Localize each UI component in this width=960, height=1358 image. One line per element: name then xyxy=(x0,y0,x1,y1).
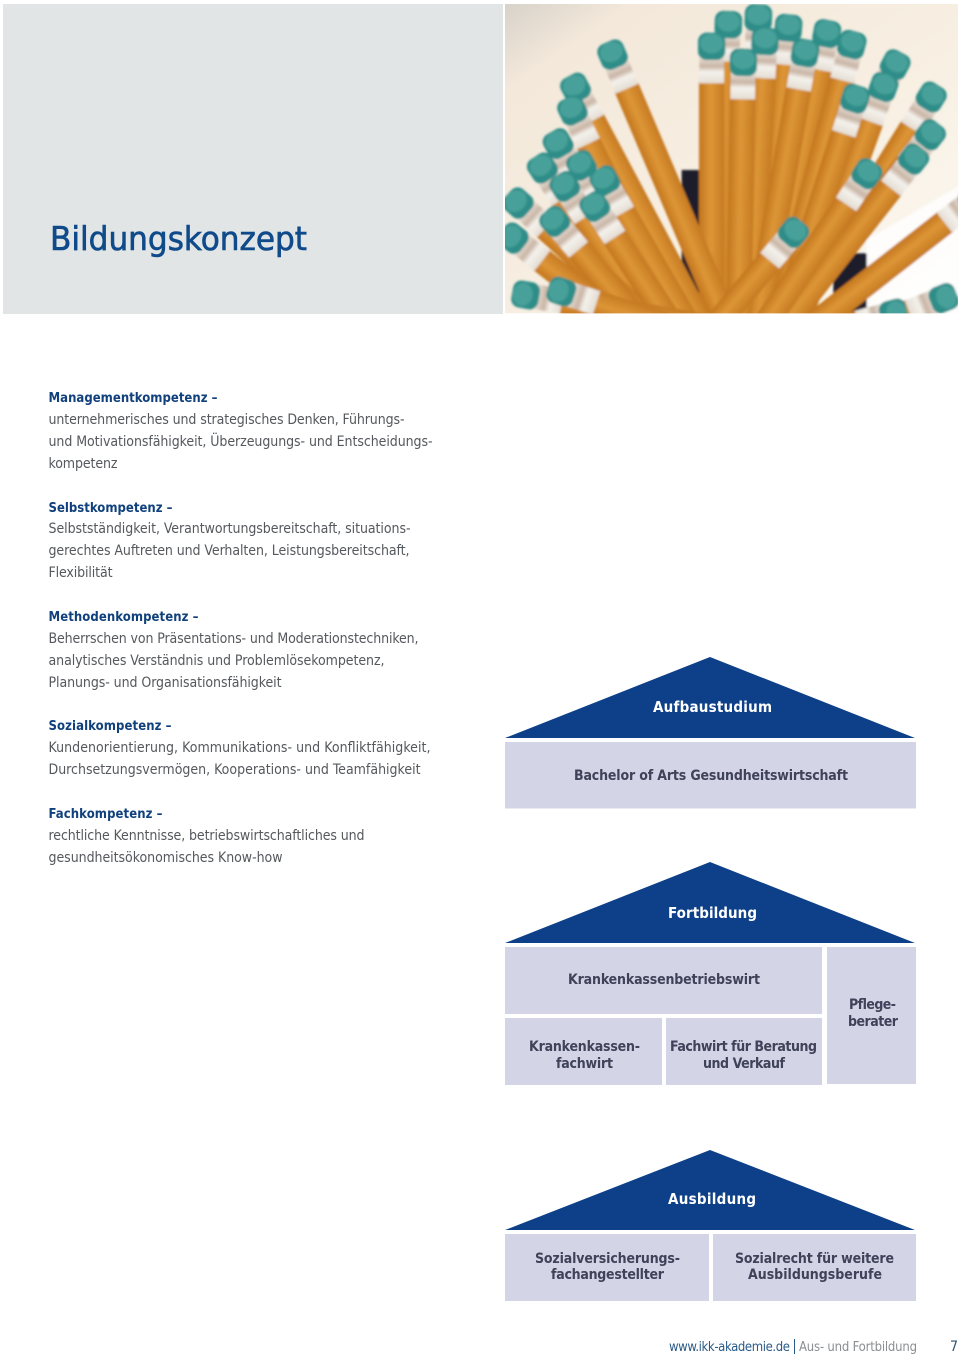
competency: Selbst: Selbstständigkeit, Verantwortungsbereitschaft, situations- xyxy=(48,521,410,537)
roof: Aufbaustudium: Aufbaustudium xyxy=(653,698,772,716)
box: Pflegeberater: berater xyxy=(848,1014,899,1030)
box: Sozialversicherungsfachangestellter: Sozialversicherungs- xyxy=(535,1251,680,1267)
competency: Methoden: Planungs- und Organisationsfähigkeit xyxy=(48,675,282,691)
footer: Aus- und Fortbildung xyxy=(799,1340,917,1355)
competency: Sozial xyxy=(48,719,430,778)
roof: Aufbaustudium xyxy=(505,657,915,738)
competency: Methoden: Beherrschen von Präsentations- und Moderationstechniken, xyxy=(48,631,418,647)
competency: Methoden: Methodenkompetenz – xyxy=(48,610,199,625)
competency: Selbst xyxy=(48,501,410,581)
box: Krankenkassenbetriebswirt xyxy=(505,947,822,1014)
competency: Selbst: Selbstkompetenz – xyxy=(48,501,173,516)
roof: Fortbildung: Fortbildung xyxy=(668,904,757,922)
competency: Fach: rechtliche Kenntnisse, betriebswirtschaftliches und xyxy=(48,828,364,844)
competency: Selbst: gerechtes Auftreten und Verhalten, Leistungsbereitschaft, xyxy=(48,543,410,559)
box: Fachwirt für Beratung und Verkauf xyxy=(666,1018,822,1085)
text block: competencies xyxy=(48,391,432,866)
competency: Management: Managementkompetenz – xyxy=(48,391,218,406)
competency: Methoden xyxy=(48,610,418,691)
header panel xyxy=(3,4,503,314)
footer xyxy=(669,1339,958,1355)
box: Krankenkassenfachwirt xyxy=(505,1018,662,1085)
box: Krankenkassenfachwirt: fachwirt xyxy=(556,1056,613,1072)
competency: Sozial: Durchsetzungsvermögen, Kooperations- und Teamfähigkeit xyxy=(48,762,421,778)
competency: Methoden: analytisches Verständnis und Problemlösekompetenz, xyxy=(48,653,384,669)
house diagram: Fortbildung xyxy=(505,862,916,1085)
competency: Management: kompetenz xyxy=(48,456,118,472)
box: Krankenkassenbetriebswirt: Krankenkassenbetriebswirt xyxy=(568,972,760,988)
competency: Management: und Motivationsfähigkeit, Überzeugungs- und Entscheidungs- xyxy=(48,432,432,450)
box: Bachelor of Arts: Bachelor of Arts Gesundheitswirtschaft xyxy=(574,768,848,784)
competency: Selbst: Flexibilität xyxy=(48,565,113,581)
box: Krankenkassenfachwirt: Krankenkassen- xyxy=(529,1039,640,1055)
box: Sozialrecht für weitere Ausbildungsberufe xyxy=(713,1234,916,1301)
house diagram: Ausbildung xyxy=(505,1150,916,1301)
photo: pencils with teal erasers xyxy=(505,4,958,314)
competency: Fach: Fachkompetenz – xyxy=(48,807,163,822)
competency: Fach xyxy=(48,807,364,866)
box: Sozialrecht für weitere Ausbildungsberufe: Ausbildungsberufe xyxy=(748,1267,882,1283)
roof: Ausbildung xyxy=(505,1150,915,1230)
footer: www.ikk-akademie.de xyxy=(669,1340,790,1355)
competency: Sozial: Sozialkompetenz – xyxy=(48,719,172,734)
box: Fachwirt für Beratung und Verkauf: und Verkauf xyxy=(703,1056,786,1072)
roof: Ausbildung: Ausbildung xyxy=(668,1190,756,1208)
box: Fachwirt für Beratung und Verkauf: Fachwirt für Beratung xyxy=(670,1039,817,1055)
box: Pflegeberater xyxy=(827,947,916,1084)
roof: Fortbildung xyxy=(505,862,915,943)
competency: Fach: gesundheitsökonomisches Know-how xyxy=(48,850,282,866)
competency: Sozial: Kundenorientierung, Kommunikations- und Konfliktfähigkeit, xyxy=(48,740,430,756)
box: Bachelor of Arts xyxy=(505,742,916,808)
footer: 7 xyxy=(950,1339,958,1355)
competency: Management: unternehmerisches und strategisches Denken, Führungs- xyxy=(48,412,404,428)
box: Sozialversicherungsfachangestellter xyxy=(505,1234,709,1301)
box: Sozialversicherungsfachangestellter: fachangestellter xyxy=(551,1267,665,1283)
house diagram: Aufbaustudium xyxy=(505,657,916,808)
title: Bildungskonzept xyxy=(50,219,307,258)
box: Sozialrecht für weitere Ausbildungsberufe: Sozialrecht für weitere xyxy=(735,1251,894,1267)
competency: Management xyxy=(48,391,432,472)
box: Pflegeberater: Pflege- xyxy=(849,997,896,1013)
